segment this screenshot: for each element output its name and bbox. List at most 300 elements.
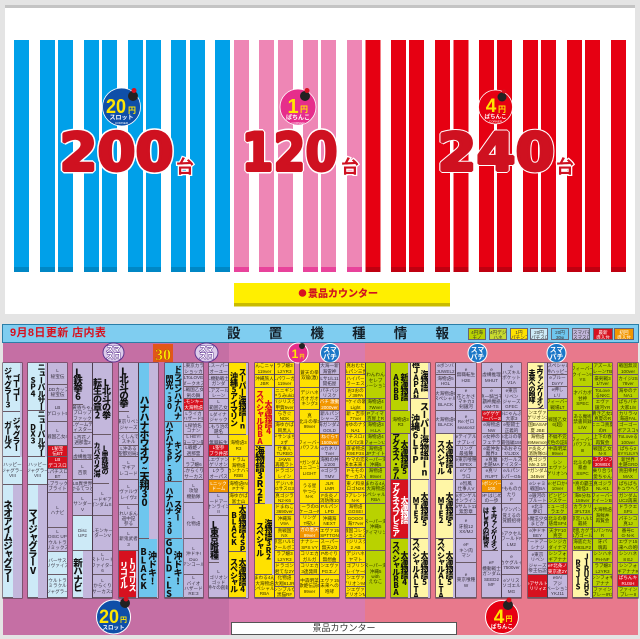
column: 4 yen mixed 5: シンフォ [619, 563, 637, 568]
column: 1 yen sea story 1: 海ゆかば [229, 493, 248, 498]
column: smart pachinko 3: リベン [505, 394, 518, 399]
icon: smart slot: スロ [199, 352, 214, 360]
column: hokuto and rezero: レイヴ2 [120, 495, 137, 500]
column: 4 yen mixed 4: 再覧会 [596, 518, 609, 523]
icon: 1 yen pachinko badge: CORNER [291, 121, 305, 125]
column: smart pachinko 3: eルパン [503, 468, 520, 473]
column: smart pachinko 3: V1A [507, 380, 516, 385]
column: 4 yen mixed 3: 159ver [575, 498, 590, 503]
column: evangelion: 海物語 [531, 434, 544, 439]
column: smart pachinko and 1 yen: 海雷神 [323, 368, 336, 374]
heading: 120 machines: 120 [242, 122, 338, 184]
column: 1 yen sea story 1: R3 [236, 446, 241, 450]
column: smart pachinko 3: ジャーズ [503, 399, 520, 404]
column: 4 yen mixed 5: 100ver [621, 440, 635, 444]
column: smart pachinko 1: 牙狼12 [459, 524, 473, 529]
column: evangelion: 帝王伝説 [528, 568, 547, 573]
column: hokuto: L [101, 491, 104, 496]
column: smart slot 4: ドーム [212, 486, 225, 491]
icon: smart slot [103, 343, 124, 362]
icon: smart slot: スロ [106, 352, 121, 360]
column: smart slot 1: BT [55, 474, 60, 479]
column: 1 yen mixed 3: 2 AB [351, 544, 360, 550]
column: smart pachinko and 1 yen: Pめぐり [321, 551, 338, 556]
column: 4 yen mixed 1: 沖縄5 [370, 462, 381, 467]
column: 1 yen mixed 3: GOSEI [348, 509, 363, 514]
icon: 4 yen pachinko badge: CORNER [489, 120, 503, 124]
icon: 1 yen pachinko badge [280, 88, 316, 125]
column: 1 yen mixed 2: ガの悪天 [300, 527, 319, 532]
column: 4 yen mixed 3: 最終 [578, 521, 587, 526]
column: smart pachinko 1: 剣銀河 [459, 404, 473, 409]
header bar [2, 324, 639, 343]
column: evangelion: 夢幻 [533, 509, 542, 514]
column: smart pachinko and 1 yen: スーパー [320, 539, 339, 544]
icon: 20 yen slot badge: 20 [106, 96, 126, 118]
column: smart slot 3: L [192, 546, 195, 551]
icon: 1 yen [288, 343, 308, 363]
column: smart pachinko 3: LM2 [507, 542, 516, 547]
column: 1 yen mixed 1: 化物語 [278, 575, 291, 580]
column: 1 yen mixed 3: 77ver [350, 416, 361, 421]
column: smart pachinko 2: NW [488, 428, 495, 432]
column: hokuto and rezero: L [127, 460, 130, 465]
column: 4 yen mixed 5 [618, 363, 638, 598]
column: smart slot 3: ショッカ [184, 368, 203, 374]
column: smart slot 3: ラブ嬢6 [185, 462, 202, 467]
column: smart pachinko 2: e女神の [483, 434, 500, 439]
column: 4 yen mixed 1: 沖縄5 [370, 569, 381, 574]
column: hokuto and rezero: L [127, 505, 130, 510]
column: 1 yen sea story 2: RBA [260, 591, 269, 596]
column: smart slot 3: 攻殻 [189, 488, 198, 493]
column: smart pachinko and 1 yen: 消防隊10 [320, 498, 339, 503]
column: 1 yen mixed 2: 蒼天の拳 [300, 370, 319, 375]
column: smart slot 1: 伝BT [52, 451, 63, 456]
column: 4 yen mixed 4: 真ゴジラ [593, 481, 612, 486]
legend: モノ [472, 334, 482, 340]
column: smart slot 3 [184, 363, 203, 598]
column: 4 yen sea story lime: R3 [398, 422, 403, 427]
column: evangelion: リベン [531, 557, 544, 562]
column: smart pachinko 3: 大家3 [506, 416, 517, 421]
column: smart slot 2 [73, 363, 92, 598]
column: 1 yen mixed 3: 真おむた [346, 363, 365, 368]
column: smart pachinko 1: eソラ [460, 468, 472, 473]
column: 4 yen mixed 2: 10ver [552, 486, 563, 491]
column: 4 yen mixed 1: 沖縄5 [370, 524, 381, 529]
column: evangelion: プルート [528, 498, 547, 503]
column: smart pachinko 2: 100 [488, 486, 495, 491]
column: smart slot 2: L [81, 448, 84, 453]
column: smart pachinko 1: マキカ3 [458, 399, 474, 404]
column: smart slot 4: L聖参 [213, 445, 224, 450]
column: smart pachinko and 1 yen: Tver [325, 451, 334, 456]
column: smart slot 4: Lニック [210, 481, 227, 486]
column: 4 yen mixed 3: 3FLT3X [574, 509, 590, 514]
column: evangelion [528, 363, 547, 598]
column: 4 yen mixed 2: ギアナナ [548, 556, 567, 562]
column: 4 yen mixed 3: L/W [578, 425, 587, 430]
column: 4 yen mixed 3: YS [579, 377, 586, 382]
column: smart pachinko 2: 魔界3 [486, 451, 497, 456]
column: 1 yen sea story 2: 119ver [258, 368, 271, 374]
column: 1 yen mixed 1: ラブ嬢3 [276, 551, 293, 556]
column: smart slot 1: LB [55, 457, 60, 462]
column: smart pachinko 2: AM-TS [484, 404, 499, 409]
column: 4 yen mixed 2: e6A/ [553, 575, 562, 580]
column: smart slot 4: ジャック [209, 417, 228, 422]
column: smart pachinko 1: e [465, 414, 467, 419]
column: 4 yen mixed 3: 禁書目録 [573, 419, 592, 424]
column: smart pachinko 3: e [510, 554, 513, 559]
column: smart pachinko 1: e [465, 572, 467, 577]
column: 1 yen mixed 1: 甲賀5ver [275, 404, 294, 410]
icon: 20 yen slot badge: スロット [109, 114, 134, 122]
bars: 20 yen slot machines [14, 40, 230, 272]
column: evangelion: リリィZ [529, 586, 546, 591]
column: 4 yen sea story lime [391, 363, 410, 598]
column: smart slot 2: L百花ノ [74, 435, 91, 440]
column: smart slot 3: 週那霊 [187, 450, 200, 456]
column: 4 yen mixed 1: 海物語 [369, 468, 382, 473]
column: juggler 1 [3, 363, 22, 598]
column: 1 yen mixed 2: ナナシー [300, 539, 319, 544]
column: smart slot 4: ゲリオン [209, 462, 228, 467]
column: smart slot 4: 範囲乙女 [209, 404, 228, 410]
column: hokuto and rezero: L [127, 484, 130, 489]
column: smart slot 3: L [192, 515, 195, 520]
column: smart pachinko 3: ハズキル [502, 370, 521, 375]
column: 4 yen mixed 2: シン [553, 460, 562, 465]
icon: 20 yen slot badge: CORNER [115, 121, 129, 125]
column: 4 yen mixed 1: 7Wver [369, 404, 382, 410]
column: 1 yen sea story 2: 沖縄旅人 [255, 376, 274, 381]
column: 4 yen mixed 3: 甘神 [578, 396, 587, 401]
column: hokuto and rezero: 道中記 [122, 516, 135, 521]
column: 4 yen mixed 1: 海物語4 [367, 399, 384, 404]
column: 1 yen mixed 1: GサスG3 [275, 486, 294, 491]
legend: 導入台 [596, 334, 610, 340]
column: evangelion: BEY [533, 533, 542, 538]
column: 1 yen mixed 2: N-K [306, 494, 313, 499]
column: smart pachinko and 1 yen: LMR [325, 486, 334, 491]
column: 4 yen mixed 2: 不偏不党 [548, 434, 567, 439]
column: 4 yen mixed 4: L2YR3 [595, 568, 610, 574]
column: 1 yen mixed 3: GOGO! [348, 516, 363, 521]
column: smart slot 2: Disc [78, 528, 87, 533]
column: 4 yen mixed 5: パチンコ [619, 516, 637, 521]
heading: 200 machines: 台 [176, 156, 194, 178]
column: 4 yen mixed 1: 海物語4 [367, 434, 384, 439]
column: smart slot 4: 無職転生 [209, 440, 228, 444]
column: 4 yen sea story pale 2: eボンバ [437, 363, 454, 368]
column: hokuto: ターンV [94, 533, 111, 538]
column: 1 yen mixed 2: コリエカ [300, 551, 319, 556]
column: smart pachinko 1: 紫影章 [459, 509, 473, 514]
column: 4 yen mixed 5: エヴァ15 [619, 539, 637, 544]
column: 4 yen mixed 3: M93LP2 [574, 544, 591, 550]
bars: 4 yen pachinko [366, 40, 626, 272]
column: 4 yen mixed 3: III [581, 448, 584, 453]
column: smart slot 4: II [217, 509, 220, 514]
heading: 240 machines: 240 [438, 122, 554, 184]
column: 4 yen mixed 4: N-X [599, 451, 606, 456]
icon: 20 yen slot badge [102, 88, 140, 126]
column: 4 yen mixed 5: 100ver [621, 368, 635, 374]
column: 1 yen mixed 3: デジハネ [346, 551, 365, 556]
column: smart slot 3: 沖ドキ! [186, 551, 201, 556]
column: 4 yen mixed 1: わんわん [366, 372, 385, 377]
column: smart pachinko 1: e烈風 [460, 481, 472, 486]
column: juggler 1: ハッピー [3, 462, 22, 467]
column: hokuto and rezero: 3 [127, 542, 130, 547]
icon: 1 yen: 円 [299, 354, 305, 360]
column: evangelion: 戦国BA [530, 486, 545, 491]
column: 4 yen mixed 2: eF北条ノ [548, 563, 567, 568]
column: smart slot 2: L [81, 464, 84, 469]
column: smart slot 1: バーサス [48, 558, 67, 563]
column: 1 yen mixed 3: Pモモの [347, 468, 364, 473]
column: smart pachinko 3: GFEC [505, 404, 518, 409]
column: 1 yen mixed 3: Light [351, 404, 360, 410]
column: 4 yen mixed 1: JPナイト [366, 451, 385, 456]
bars: 1 yen pachinko [234, 40, 362, 272]
column: evangelion: Me.3 19 [529, 462, 546, 467]
column: 4 yen mixed 4: レーンTB [593, 368, 612, 374]
column: 1 yen mixed 2: パワフル [300, 445, 319, 450]
column: smart slot 4: Lクラ [213, 468, 224, 473]
column: 1 yen mixed 2: コリエカ [300, 563, 319, 568]
icon: 1 yen: 1 [292, 347, 299, 361]
column: 4 yen mixed 2: 東京連2Y [548, 568, 567, 574]
column: 1 yen mixed 1: 海ゆかば [275, 422, 294, 427]
column: smart pachinko and 1 yen: リスク [323, 393, 336, 398]
column: 4 yen mixed 2: 戦場LT [550, 404, 565, 410]
column: 4 yen mixed 5: UC2再来 [619, 498, 637, 503]
column: 1 yen mixed 2: ガルガ [303, 556, 316, 562]
column: smart pachinko and 1 yen: TMV [325, 474, 334, 478]
column: hokuto and rezero: L [127, 531, 130, 536]
column: 4 yen mixed 3: 暴虐 [578, 465, 587, 470]
column: smart pachinko 3: たり [507, 492, 516, 496]
column: 1 yen sea story 2: JBR [260, 381, 269, 386]
column: smart pachinko 2: e [490, 388, 493, 393]
column: smart pachinko and 1 yen: 未来への [320, 583, 339, 588]
column: 4 yen mixed 4: 大海物語 [593, 507, 612, 512]
column: 4 yen mixed 1: H.LA [370, 428, 381, 432]
column: 4 yen mixed 5: 真田幸村 [619, 468, 637, 473]
column: smart slot 3: コナン [187, 428, 200, 433]
column: smart pachinko 2: の一歩 [485, 498, 498, 503]
column: 1 yen mixed 1: L2YR3 [277, 556, 292, 562]
column: smart slot 2: 虚構推理 [73, 454, 92, 458]
column: smart pachinko and 1 yen: GOLD [323, 428, 336, 432]
heading: 240 machines: 台 [556, 156, 574, 178]
heading: installed machines information: 設置機種情報 [227, 326, 477, 341]
column: smart slot 1: ウルトラ [48, 578, 67, 583]
column: smart slot 3: L探偵名 [185, 423, 202, 428]
column: smart pachinko 2: 虚構推理 [482, 372, 501, 377]
icon: smart slot: スマ [199, 344, 214, 354]
column: 4 yen mixed 1: セレブ [369, 378, 382, 383]
legend: 1円 [515, 330, 523, 334]
column: 4 yen mixed 2 [548, 363, 567, 598]
column: 4 yen mixed 4: 再覧会 [596, 440, 609, 444]
column: evangelion: まどか [531, 521, 544, 526]
column: 4 yen mixed 5: RUSH [621, 580, 634, 586]
column: smart pachinko and 1 yen: エヴァ15 [320, 578, 339, 583]
column: 4 yen mixed 4: 1/7ver [596, 381, 609, 386]
column: 4 yen mixed 5: 8 EJ [623, 556, 633, 562]
icons: corner badges row [102, 342, 566, 364]
column: smart pachinko 3: ソゴエル [502, 583, 521, 588]
icon: 20 yen slot badge bottom: 20 [99, 607, 119, 628]
column: smart pachinko 1: 無職転生 [457, 372, 475, 377]
column: 4 yen mixed 2: ダイナマ [548, 544, 567, 550]
column: 1 yen mixed 1: V9A [280, 521, 289, 526]
icon: smart pachinko: パチ [323, 353, 337, 361]
column: smart slot 1: 秘宝伝 [51, 392, 64, 397]
column: smart pachinko and 1 yen: PGエノ [322, 568, 337, 574]
icon: smart pachinko [320, 344, 340, 362]
column: smart pachinko 2: e真リ [486, 468, 497, 473]
column: smart slot 4: ブラ井部 [209, 450, 228, 456]
column: smart slot 4 [209, 363, 228, 598]
icon: 4 yen pachinko badge bottom [485, 598, 519, 634]
column: 4 yen mixed 5: 海道FAL [619, 416, 637, 421]
column: 1 yen mixed 3: パパ2洋 [347, 440, 364, 444]
column: 4 yen mixed 5: カイジ2S [618, 376, 638, 381]
column: 1 yen mixed 3: ロゴN2K [346, 486, 365, 491]
column: smart pachinko and 1 yen: SPTTON [320, 533, 339, 538]
column: smart pachinko 1: BPEX [460, 462, 472, 467]
column: smart pachinko 3: e聖闘士 [503, 422, 520, 427]
column: 4 yen mixed 3: 海底ただ [573, 539, 592, 544]
column: 1 yen mixed 2: デジハネ [300, 390, 319, 395]
column: 1 yen mixed 1: 2ず [281, 440, 288, 444]
column: 4 yen mixed 4: 真夏のR [594, 416, 611, 421]
column: hokuto [93, 363, 112, 598]
column: 1 yen mixed 1: L2YR3 [277, 368, 292, 374]
column: 1 yen mixed 1: 黒猫RF [277, 592, 292, 597]
column: 4 yen sea story pale 2: HGL [441, 381, 450, 386]
column: 4 yen mixed 5: 78ver [622, 381, 634, 386]
column: smart pachinko and 1 yen [320, 363, 339, 598]
column: 4 yen mixed 4: 豪剣戦3 [594, 376, 611, 381]
column: smart slot 1: ハナビ [51, 510, 64, 515]
icon: 4 yen pachinko badge bottom: 4 [494, 607, 505, 628]
column: 4 yen mixed 1: 99ver [370, 474, 381, 478]
column: smart slot 1: L [56, 368, 59, 373]
legend: 20円 [555, 330, 565, 334]
column: smart slot 4: L [217, 493, 220, 498]
column: smart slot 1: L [56, 428, 59, 433]
icon: smart slot: スマ [106, 344, 121, 354]
column: smart slot 2: サンダー [73, 501, 92, 506]
column: 4 yen sea story pale 2: BLACK [438, 422, 453, 427]
column: hokuto and rezero: マギア [122, 465, 135, 470]
column: 4 yen mixed 3 [573, 363, 592, 598]
column: 1 yen mixed 2: LIGHT [303, 471, 316, 476]
column: smart pachinko 2: SEED2 [484, 577, 499, 582]
icon: smart pachinko [468, 344, 487, 362]
column: 1 yen mixed 2: 99ver [304, 424, 315, 429]
column: evangelion: ジャーズ [529, 562, 546, 568]
column: 4 yen mixed 2: 6(超) [552, 422, 563, 427]
prize counter label: 景品カウンター [312, 623, 376, 633]
column: smart pachinko and 1 yen: 開拓屋 [323, 381, 336, 386]
legend: 導入台 [617, 334, 631, 340]
icon: 30 machine badge: 30 [155, 347, 171, 364]
column: 4 yen mixed 5: ToLoveる [618, 434, 638, 439]
column: 1 yen sea story 1: Pナギ [232, 486, 245, 491]
column: smart slot 2: プロップ [73, 410, 92, 415]
column: smart pachinko 1: H2E [462, 378, 470, 383]
legend: 4円デジ [490, 330, 506, 334]
column: smart slot 3: RE:3 [188, 591, 199, 596]
column: 4 yen mixed 2: e押し [552, 387, 563, 392]
column: 4 yen mixed 4: のR [599, 428, 606, 432]
column: 1 yen mixed 1: 3690ver [276, 509, 293, 514]
column: smart pachinko 3: F [510, 497, 513, 502]
column: 4 yen mixed 4: アナナ [596, 580, 609, 586]
column: 1 yen mixed 3: ゴブリン [346, 563, 365, 568]
icon: smart pachinko: パチ [550, 353, 564, 361]
column: 1 yen mixed 1: レイン [278, 474, 291, 478]
column: 4 yen sea story pale 2 [436, 363, 455, 598]
column: 4 yen mixed 5: SP1 [624, 509, 632, 514]
column: 1 yen mixed 3: ノ39PA [348, 393, 363, 398]
column: smart slot 2: LB異世界 [73, 481, 92, 486]
heading: 200 machines: 200 [60, 122, 174, 184]
column: 4 yen mixed 2: シンフォ [548, 551, 567, 556]
column: hokuto and rezero: れいまん [119, 511, 138, 516]
column: 4 yen mixed 1: 百屋上R [367, 416, 384, 421]
icon: 30 machine badge [153, 344, 173, 364]
column: 4 yen sea story pale 2: JUWEL2 [436, 368, 455, 374]
column: 4 yen mixed 2: YKJ11 [551, 591, 564, 596]
column: smart slot 4: ゴリオン [209, 575, 228, 580]
column: 1 yen mixed 3: ハイパー [346, 376, 365, 381]
column: juggler 1: VIII [9, 473, 16, 478]
column: 4 yen mixed 2: DxYY [552, 380, 563, 386]
column: 1 yen mixed 1 [275, 363, 294, 598]
column: 4 yen mixed 2: アジ [553, 581, 562, 586]
column: 1 yen sea story 1: 海物語3 [230, 440, 247, 445]
column: smart slot 3: L [192, 575, 195, 580]
column: smart pachinko 1 [456, 363, 476, 598]
column: 1 yen mixed 1: 再臨ラト [275, 462, 294, 467]
column: 4 yen mixed 3: 北斗の拳 [573, 460, 592, 465]
column: smart pachinko 2: MF [488, 582, 495, 587]
icon: smart pachinko: スマ [471, 346, 484, 354]
icon: smart pachinko: スマ [323, 346, 337, 354]
icon: smart pachinko: パチ [470, 353, 484, 361]
column: 4 yen mixed 4: 30WBX [595, 462, 610, 467]
title: update date and store: 9月8日更新 店内表 [10, 327, 106, 339]
column: smart slot 3: バイオ [187, 581, 200, 586]
heading: 200 machines: 200 [60, 122, 174, 184]
column: smart slot 4: ガンダ [212, 381, 225, 386]
column: smart pachinko 1: ラロ [461, 474, 471, 478]
column: smart slot 2: UP2 [78, 533, 87, 538]
column: 4 yen mixed 4: シンハネ [593, 551, 612, 556]
heading: 120 machines: 120 [242, 122, 338, 184]
column: 4 yen mixed 5: ブレーII [620, 592, 636, 597]
column: 1 yen mixed 3: ヤマト [349, 556, 362, 562]
column: smart slot 1: ブライト [48, 486, 67, 491]
